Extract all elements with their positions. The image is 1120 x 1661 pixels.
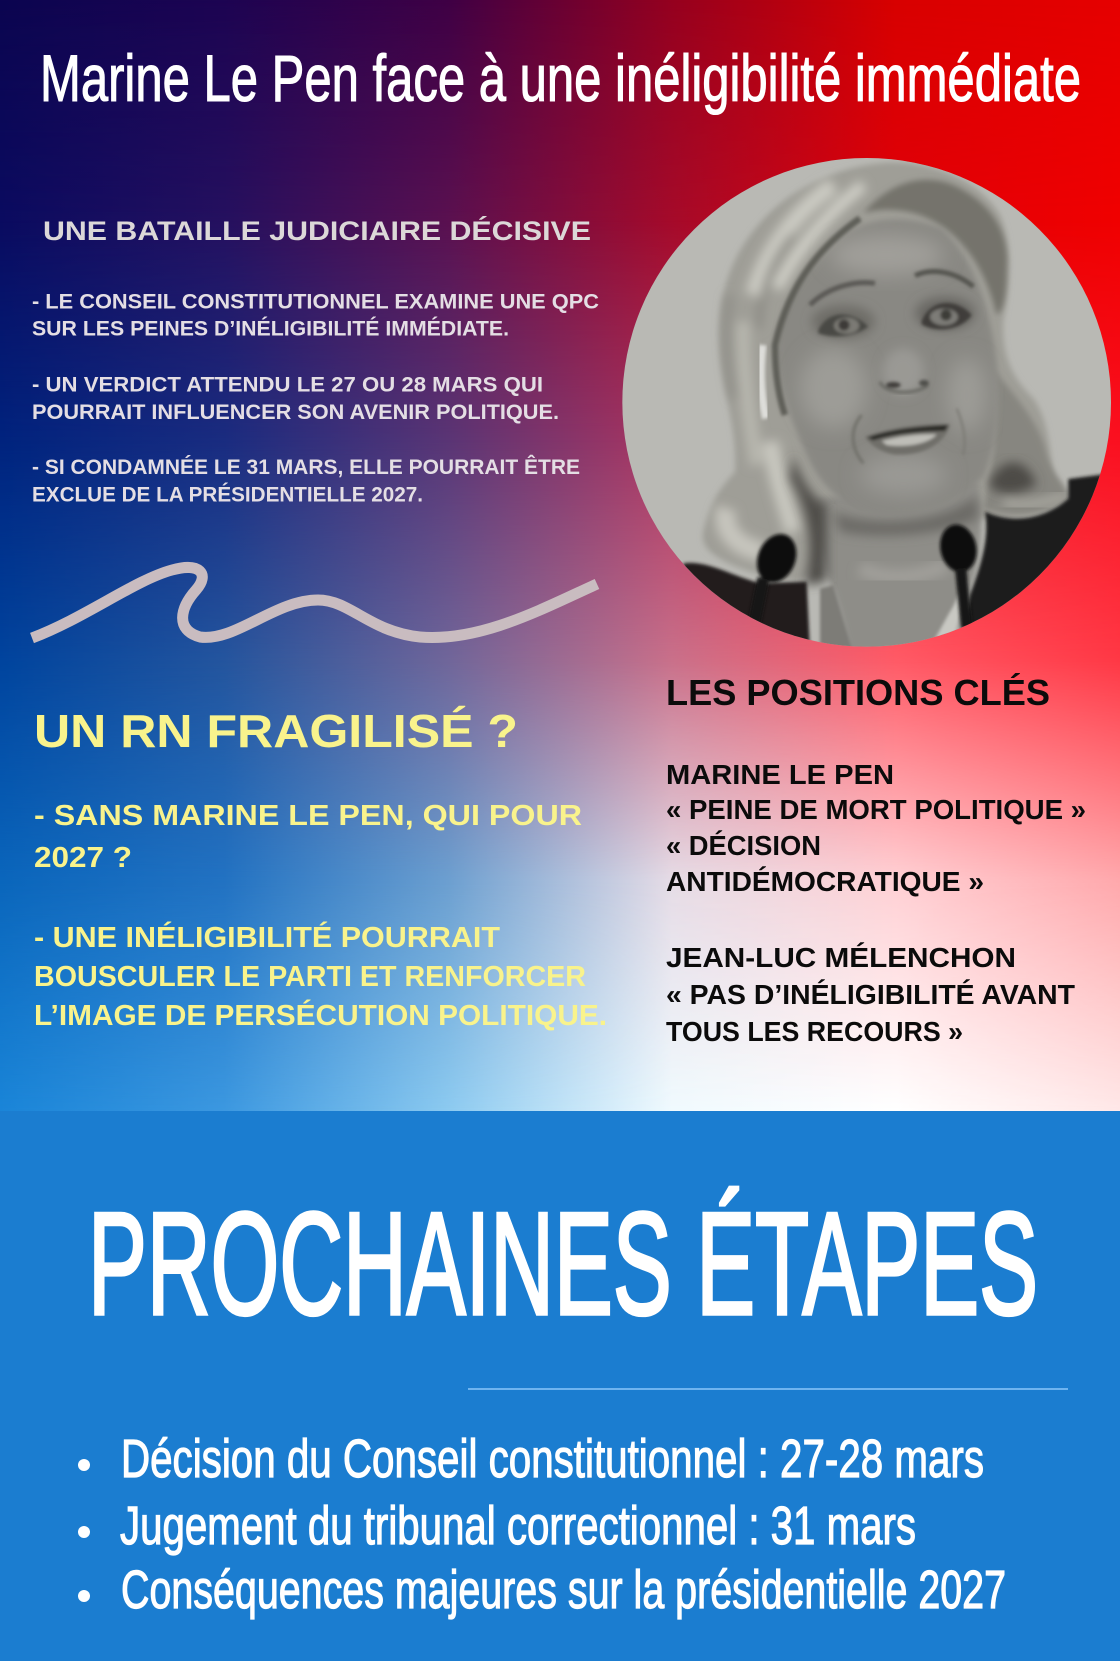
- text block: si condamnée: - SI CONDAMNÉE LE 31 MARS, ELLE POURRAIT ÊTRE: [32, 455, 580, 479]
- text block: Marine Le Pen quotes: ANTIDÉMOCRATIQUE »: [666, 866, 984, 897]
- mouth: [865, 424, 950, 455]
- text block: inéligibilité: L’IMAGE DE PERSÉCUTION POLITIQUE.: [34, 998, 607, 1032]
- left eye socket and eye: [812, 305, 875, 338]
- microphones: [750, 521, 981, 628]
- panel: une bataille judiciaire décisive: [32, 215, 599, 506]
- text block: Marine Le Pen quotes: « DÉCISION: [666, 830, 821, 861]
- nose: [883, 348, 924, 390]
- text block: si condamnée: [32, 455, 580, 506]
- decorative squiggle line: [32, 567, 597, 638]
- right eye socket and eye: [915, 297, 975, 330]
- text block: inéligibilité: - UNE INÉLIGIBILITÉ POURRAIT: [34, 920, 500, 954]
- text block: verdict attendu: [32, 374, 559, 424]
- text block: Jean-Luc Mélenchon quote: JEAN-LUC MÉLENCHON: [666, 942, 1016, 973]
- text block: Marine Le Pen quotes: « PEINE DE MORT POLITIQUE »: [666, 794, 1086, 825]
- text block: Jean-Luc Mélenchon quote: [666, 942, 1075, 1047]
- text block: qui pour 2027: - SANS MARINE LE PEN, QUI POUR: [34, 800, 582, 832]
- cheek lights: [800, 348, 867, 428]
- hair dark top right: [863, 180, 1068, 514]
- text block: verdict attendu: POURRAIT INFLUENCER SON AVENIR POLITIQUE.: [32, 401, 559, 424]
- hair highlights left: [725, 185, 863, 552]
- face: [775, 218, 998, 514]
- text block: Jean-Luc Mélenchon quote: « PAS D’INÉLIGIBILITÉ AVANT: [666, 979, 1075, 1010]
- text block: si condamnée: EXCLUE DE LA PRÉSIDENTIELLE 2027.: [32, 484, 423, 506]
- bright strand: [761, 345, 766, 418]
- text block: inéligibilité: BOUSCULER LE PARTI ET RENFORCER: [34, 961, 586, 993]
- smile lines: [853, 408, 965, 463]
- text block: qui pour 2027: 2027 ?: [34, 842, 132, 874]
- hair mass: [703, 162, 1069, 582]
- panel: un RN fragilisé: [34, 705, 607, 1032]
- text block: qui pour 2027: [34, 800, 582, 874]
- text block: verdict attendu: - UN VERDICT ATTENDU LE 27 OU 28 MARS QUI: [32, 374, 543, 396]
- text block: Jean-Luc Mélenchon quote: TOUS LES RECOURS »: [666, 1016, 963, 1047]
- neck: [817, 482, 981, 652]
- text block: inéligibilité: [34, 920, 607, 1032]
- panel: tricolour gradient background: [0, 0, 1120, 1111]
- forehead light: [830, 235, 943, 275]
- photo: portrait of Marine Le Pen in circle: [620, 155, 1115, 652]
- text block: Marine Le Pen quotes: MARINE LE PEN: [666, 759, 894, 790]
- panel: prochaines étapes: [0, 1111, 1120, 1661]
- text block: Marine Le Pen quotes: [666, 759, 1086, 897]
- panel: les positions clés: [666, 672, 1086, 1047]
- text block: conseil constitutionnel: [32, 290, 599, 340]
- dark hair strip by cheek: [790, 455, 827, 585]
- heading: bataille judiciaire: UNE BATAILLE JUDICIAIRE DÉCISIVE: [43, 215, 591, 246]
- text block: conseil constitutionnel: - LE CONSEIL CONSTITUTIONNEL EXAMINE UNE QPC: [32, 290, 599, 314]
- jacket: [680, 474, 1107, 652]
- heading: les positions clés: LES POSITIONS CLÉS: [666, 672, 1050, 713]
- heading: un RN fragilisé: UN RN FRAGILISÉ ?: [34, 705, 518, 757]
- text block: conseil constitutionnel: SUR LES PEINES D’INÉLIGIBILITÉ IMMÉDIATE.: [32, 318, 509, 340]
- hair parting shadow: [775, 218, 860, 415]
